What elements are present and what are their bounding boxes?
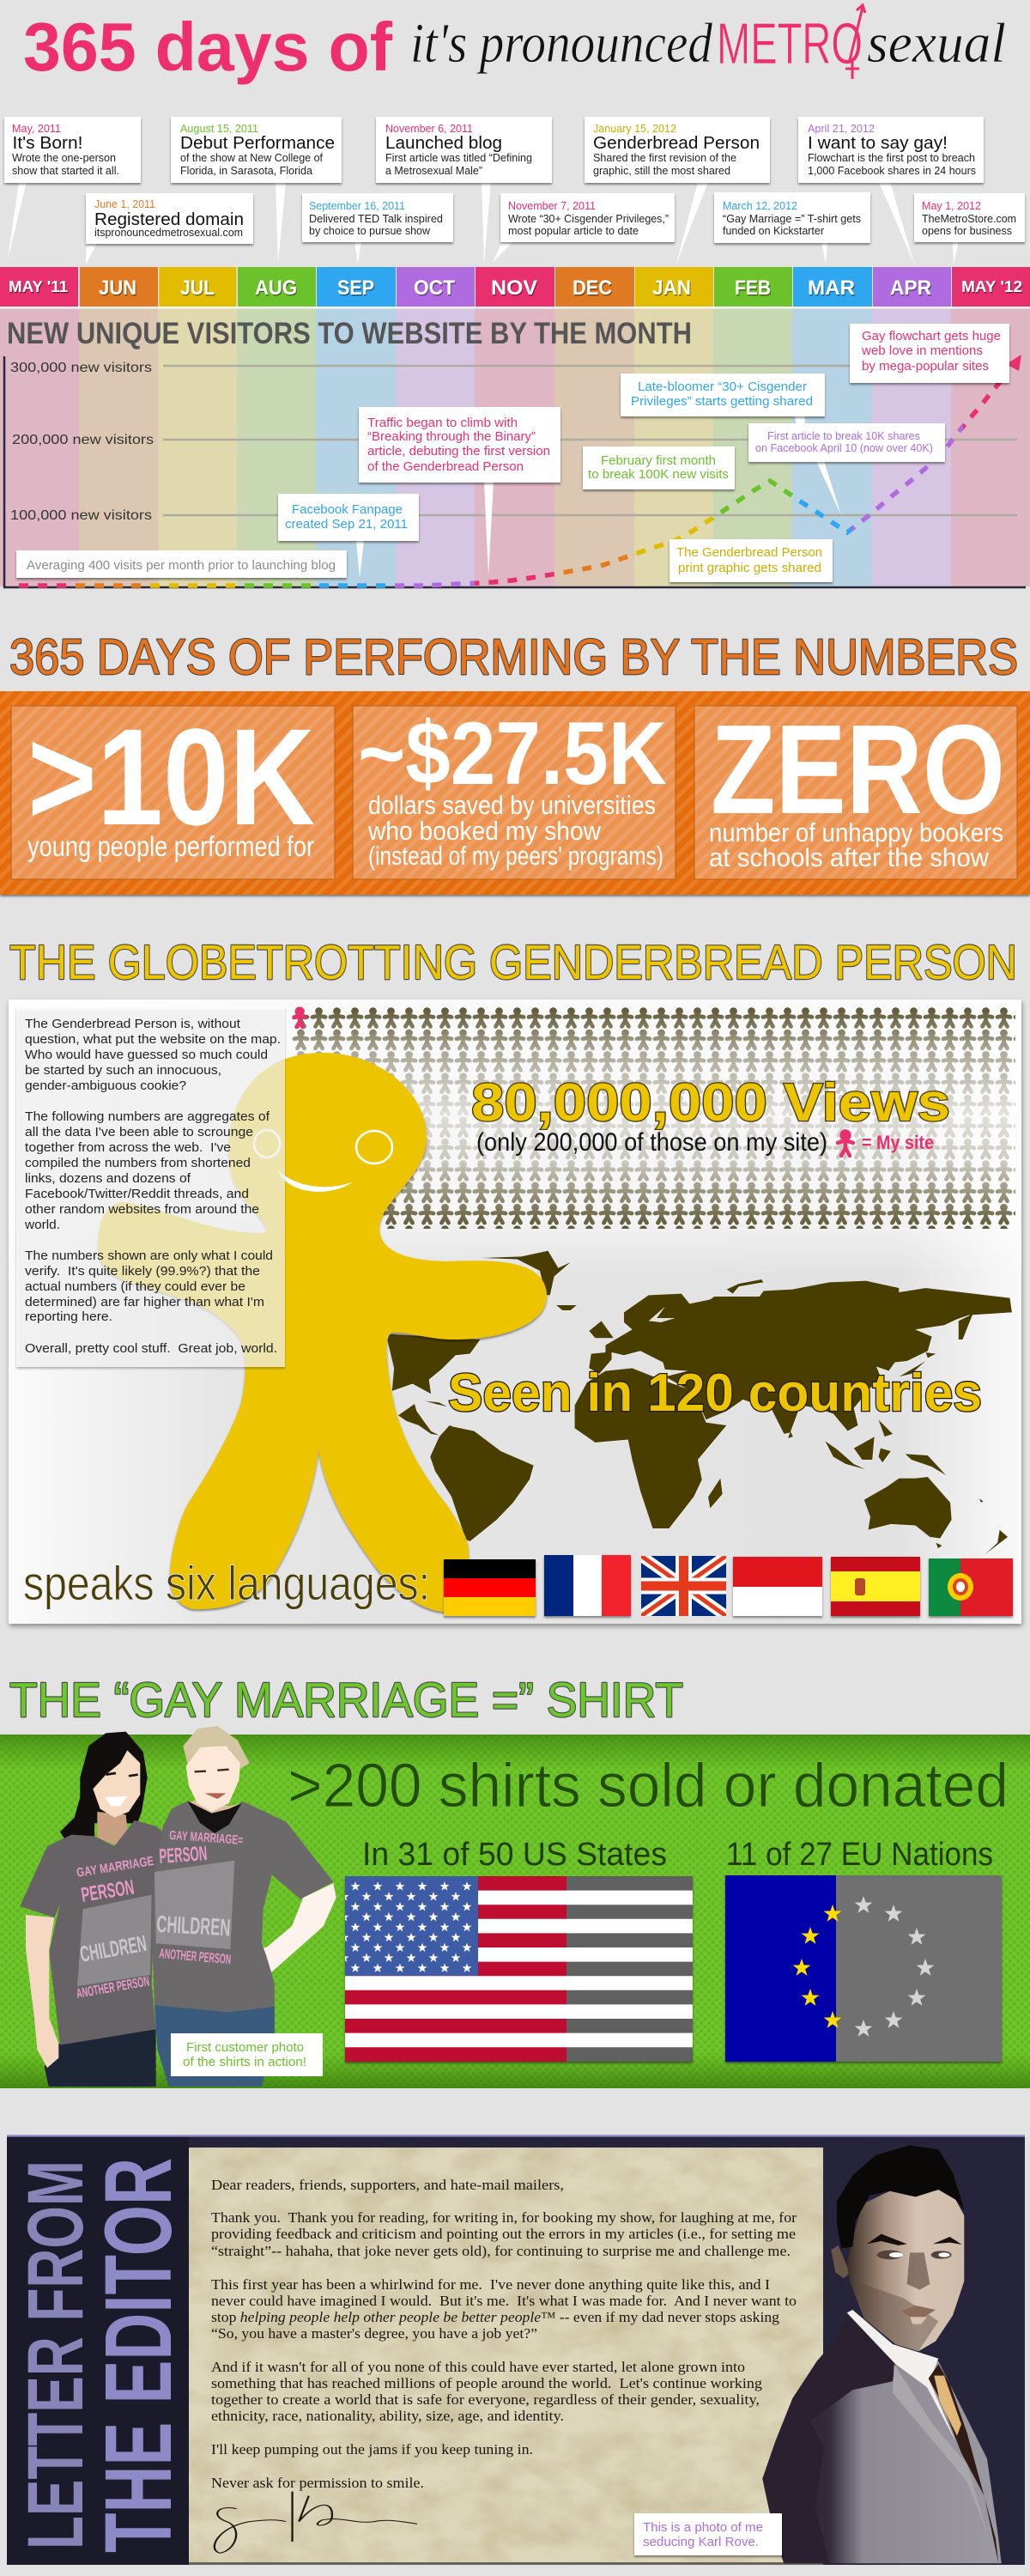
text box: intro: verify. It's quite likely (99.9%?) that the [25,1264,260,1279]
text box: intro: determined) are far higher than what I'm [25,1295,264,1309]
shirt print right: GAY MARRIAGE: GAY MARRIAGE= [169,1828,244,1848]
figure left eye [254,1130,280,1157]
axis labels: 100,000 new visitors [10,508,152,523]
chart callout: gay flowchart: by mega-popular sites [862,359,989,374]
chart axes [4,356,1026,587]
letter text: “straight”-- hahaha, that joke never gets old), for continuing to surprise me and challenge me. [211,2243,791,2259]
stat: shirts sold or donated: >200 shirts sold or donated [288,1752,1009,1820]
timeline month bar: JUL [180,276,215,300]
chart callout: gay flowchart: Gay flowchart gets huge [862,329,1001,343]
text box: intro: compiled the numbers from shortened [25,1156,251,1170]
chart callout: late-bloomer: Privileges” starts getting shared [631,394,813,409]
letter text: Thank you. Thank you for reading, for writing in, for booking my show, for laughing at me, for [211,2209,797,2226]
left shirt grey print [77,1895,152,1986]
callout: May 1 2012 [914,193,1025,264]
world map [386,1251,1012,1554]
text box: intro: all the data I've been able to scrounge [25,1125,253,1139]
right person face [186,1746,240,1812]
flag: partial EU [725,1875,1002,2062]
figure smile [277,1170,354,1192]
text box: intro: Who would have guessed so much could [25,1048,268,1062]
left person face [93,1750,140,1818]
author dark shoulder [762,2312,895,2563]
left person jeans [45,2029,156,2087]
text box: intro: together from across the web. I've [25,1140,231,1155]
timeline month bar: JAN [652,276,691,300]
timeline month bar: DEC [573,276,612,300]
title: 365 days of: 365 days of [23,9,392,85]
callout: June 1 2011: June 1, 2011 [94,198,155,210]
axis labels: 300,000 new visitors [10,361,152,375]
chart callout: February first month: February first month [601,453,716,468]
stat: 80,000,000 views: 80,000,000 Views [471,1073,950,1133]
chart callout: Facebook Fanpage: created Sep 21, 2011 [285,517,408,532]
author left eye [877,2251,903,2259]
text box: intro: question, what put the website on the map. [25,1032,281,1047]
chart callout: late-bloomer: Late-bloomer “30+ Cisgender [638,380,807,394]
photo caption: First customer photo [186,2040,304,2055]
author hair [837,2145,964,2248]
text box: intro: world. [24,1218,60,1232]
callout: March 12 2012: “Gay Marriage =” T-shirt gets [723,212,861,225]
callout: April 21 2012: Flowchart is the first post to breach [808,151,975,164]
photo: author in suit [762,2145,1002,2563]
right person shirt [152,1801,333,2012]
legend: pink person icon [838,1132,853,1156]
stat: 27.5K dollars [353,704,676,879]
chart callout: first article to break 10K: First article to break 10K shares [767,430,920,442]
shirt print left: PERSON: PERSON [80,1876,136,1907]
icon: signature [215,2492,417,2553]
shirt print right: CHILDREN: CHILDREN [156,1911,231,1941]
stat: seen in 120 countries: Seen in 120 countries [448,1364,982,1423]
text box: intro: The Genderbread Person is, without [25,1017,241,1031]
people icon grid [292,1007,1015,1229]
icon: gender symbol arrows [845,5,865,79]
stat: more than 10K: young people performed for [27,830,314,862]
author lower lip [910,2317,927,2324]
chart callout: averaging 400 visits [16,550,347,578]
callout: April 21 2012: April 21, 2012 [808,123,875,135]
chart callout: Genderbread print graphic: print graphic gets shared [678,561,821,575]
flag: Portugal [929,1558,1013,1616]
timeline month bar: APR [890,276,931,300]
right person neck [189,1801,243,1832]
text box: intro: The numbers shown are only what I could [25,1249,273,1263]
callout: June 1 2011 [86,193,253,264]
left person hair [60,1732,148,1850]
text box: intro: gender-ambiguous cookie? [25,1078,186,1093]
figure right eye [356,1131,392,1163]
text box: intro [16,1007,285,1367]
left person shirt [20,1820,166,2045]
callout: November 6 2011: Launched blog [385,134,502,153]
letter paper [189,2148,823,2565]
timeline month bar: MAR [808,276,855,300]
callout: May 2011: May, 2011 [12,123,61,135]
panel: letter from the editor [7,2135,1025,2565]
chart callout: February first month [583,447,735,489]
note: only 200,000 on my site: (only 200,000 of those on my site) [476,1128,827,1157]
stat: 27.5K dollars: ~$27.5K [358,704,667,804]
stat: zero: at schools after the show [709,842,990,872]
letter text [211,2177,797,2491]
photo caption: Karl Rove: seducing Karl Rove. [643,2535,759,2549]
heading: new unique visitors: NEW UNIQUE VISITORS TO WEBSITE BY THE MONTH [7,317,692,350]
chart background month stripes [0,308,1030,586]
letter text: ethnicity, race, nationality, ability, size, age, and identity. [211,2408,564,2424]
arrow head [1006,355,1021,371]
timeline month bar: MAY '11 [9,278,68,295]
letter text: together to create a world that is safe for everyone, regardless of their gender, sexuality, [211,2391,760,2408]
left person arm [26,1915,58,2068]
callout: January 15 2012 [585,117,770,264]
callout: November 7 2011: most popular article to date [508,224,639,237]
label: EU nations: 11 of 27 EU Nations [726,1837,993,1873]
stat: 27.5K dollars: dollars saved by universities [368,790,656,820]
callout: May 2011 [4,117,141,259]
title: METRO: METRO [717,11,863,76]
right shirt grey print [154,1861,234,1949]
author brows [867,2234,962,2245]
callout: November 7 2011: Wrote “30+ Cisgender Privileges,” [508,212,669,225]
icon: pink person [294,1009,306,1027]
letter text: stop helping people help other people be better people ™ -- even if my dad never stops asking [211,2309,780,2325]
letter text: something that has reached millions of people around the world. Let's continue working [211,2375,763,2391]
right person arm [225,1883,336,1981]
axis labels [10,361,154,523]
callout: April 21 2012: I want to say gay! [808,134,948,153]
shirt print left: ANOTHER PERSON: ANOTHER PERSON [76,1974,150,2002]
text box: intro: reporting here. [25,1309,112,1324]
callout: August 15 2011: Florida, in Sarasota, Florida [180,164,313,177]
text box: intro: links, dozens and dozens of [25,1171,191,1186]
chart callout: traffic began to climb: “Breaking through the Binary” [367,429,536,444]
flags: six languages [444,1555,1013,1616]
panel: performing numbers [0,691,1030,895]
author nose shadow [907,2252,930,2290]
text box: intro: The following numbers are aggregates of [25,1109,270,1124]
callout: August 15 2011: Debut Performance [180,134,335,153]
flag: Germany [444,1559,536,1616]
callout: January 15 2012: January 15, 2012 [593,123,676,135]
callout: May 2011: Wrote the one-person [12,151,116,164]
line chart: visitors [4,355,1026,587]
callout: August 15 2011: of the show at New College of [180,151,323,164]
letter text: never could have imagined I would. But it's me. It's what I was made for. And I never want to [211,2293,797,2309]
chart callout: gay flowchart [850,324,1009,383]
callout: November 7 2011: November 7, 2011 [508,200,596,212]
left person smile [105,1796,127,1806]
stat: 27.5K dollars: (instead of my peers' programs) [368,841,663,871]
callout: March 12 2012: funded on Kickstarter [723,224,825,237]
photo caption: Karl Rove: This is a photo of me [643,2520,763,2535]
callout: May 2011: It's Born! [12,134,82,153]
title [23,5,1006,85]
flat start of visitors dashed line [19,583,423,588]
legend: my site: = My site [862,1132,934,1153]
chart callout: Facebook Fanpage: Facebook Fanpage [292,502,403,517]
timeline month bar: MAY '12 [961,278,1022,295]
photo: two people wearing shirts [20,1726,336,2087]
callout: June 1 2011: Registered domain [94,210,244,229]
chart callout: traffic began to climb [359,407,560,575]
timeline month bar: OCT [414,276,455,300]
callout: August 15 2011 [171,117,342,263]
letter text: Never ask for permission to smile. [211,2475,424,2491]
callout: November 6 2011 [376,117,552,264]
callout: March 12 2012: March 12, 2012 [723,200,797,212]
photo caption: of the shirts in action! [183,2055,306,2069]
chart callout: traffic began to climb: Traffic began to climb with [367,416,518,430]
timeline month bar: AUG [255,276,297,300]
author stubble [856,2281,938,2351]
shirt print right: PERSON: PERSON [159,1842,208,1868]
chart callout: gay flowchart: web love in mentions [861,343,983,358]
letter text: And if it wasn't for all of you none of this could have ever started, let alone grown into [211,2359,745,2375]
right person hair [183,1726,250,1769]
callout: November 6 2011: November 6, 2011 [385,123,473,135]
left person eyes [106,1773,138,1776]
heading: gay marriage shirt: THE “GAY MARRIAGE =” SHIRT [9,1673,683,1728]
chart callout: traffic began to climb: of the Genderbread Person [367,459,524,474]
callout: September 16 2011: Delivered TED Talk inspired [309,212,443,225]
callout: January 15 2012: graphic, still the most shared [593,164,730,177]
author shirt [847,2310,955,2441]
letter text: This first year has been a whirlwind for me. I've never done anything quite like this, and I [211,2276,770,2293]
text box: intro: actual numbers (if they could ever be [25,1279,245,1294]
author suit [762,2312,1002,2563]
author tie [929,2364,998,2563]
flag: Spain [831,1557,920,1616]
text box: intro: Overall, pretty cool stuff. Great job, world. [25,1341,277,1356]
heading: letter from: LETTER FROM [12,2160,100,2549]
photo caption: Karl Rove [634,2513,782,2555]
chart callout: averaging 400 visits: Averaging 400 visits per month prior to launching blog [27,558,336,573]
callout: June 1 2011: itspronouncedmetrosexual.com [94,226,243,239]
callout: September 16 2011: September 16, 2011 [309,200,405,212]
flag: Indonesia [733,1557,822,1616]
text box: intro: be started by such an innocuous, [25,1063,221,1078]
callout: January 15 2012: Shared the first revision of the [593,151,736,164]
figure: genderbread person [98,1053,547,1612]
callout: November 7 2011 [493,193,675,263]
panel: shirt [0,1726,1030,2088]
letter text: I'll keep pumping out the jams if you keep tuning in. [211,2441,533,2458]
chart callout: Facebook Fanpage [278,494,419,578]
chart callout: late-bloomer [621,374,825,438]
callout: May 1 2012: May 1, 2012 [922,200,981,212]
title: sexual: sexual [867,12,1006,75]
title: it's pronounced: it's pronounced [410,12,713,75]
heading: the editor: THE EDITOR [86,2158,191,2553]
author right eye white [938,2252,950,2257]
flag: partial US [345,1876,693,2062]
chart callout: traffic began to climb: article, debuting the first version [367,444,550,459]
stat: 27.5K dollars: who booked my show [367,816,602,846]
shirt print left: GAY MARRIAGE: GAY MARRIAGE [76,1854,155,1880]
left person neck [97,1812,129,1844]
panel: globetrotting [9,999,1021,1624]
author ear [831,2245,850,2278]
author lapel [893,2364,987,2533]
chart callout: first article to break 10K: on Facebook April 10 (now over 40K) [755,442,933,454]
letter text: Dear readers, friends, supporters, and hate-mail mailers, [211,2177,564,2193]
callout: September 16 2011: by choice to pursue show [309,224,431,237]
author mouth [901,2306,936,2317]
timeline month bar [0,267,1030,309]
letter text: “So, you have a master's degree, you have a job yet?” [211,2325,537,2342]
flag: France [544,1555,631,1616]
right person eyes [195,1770,229,1771]
photo caption [171,2033,323,2076]
author tie highlight [934,2376,961,2436]
flag: United Kingdom [641,1556,726,1616]
label: US states: In 31 of 50 US States [362,1837,667,1873]
axis labels: 200,000 new visitors [12,433,154,447]
timeline month bar: NOV [491,276,537,300]
callout: August 15 2011: August 15, 2011 [180,123,258,135]
right person jeans [154,2005,275,2087]
map sea cuts [649,1307,676,1322]
callout: May 2011: show that started it all. [12,164,119,177]
chart callout: Genderbread print graphic: The Genderbread Person [676,545,822,560]
shirt print right: ANOTHER PERSON: ANOTHER PERSON [159,1947,232,1967]
text: speaks six languages: speaks six languages: [23,1556,430,1610]
text box: intro: Facebook/Twitter/Reddit threads, and [25,1187,249,1201]
chart callout: first article to break 10K [748,423,945,515]
text box: intro: other random websites from around the [25,1202,259,1217]
author face [847,2190,964,2351]
author right eye [931,2251,952,2259]
callout: March 12 2012 [714,192,870,264]
chart callout: Genderbread print graphic [670,539,833,582]
callout: April 21 2012: 1,000 Facebook shares in 24 hours [808,164,976,177]
letter text: providing feedback and criticism and pointing out the errors in my articles (i.e., for setting me [211,2226,796,2242]
visitors dashed line [433,377,1004,586]
right shirt collar [187,1801,242,1833]
timeline month bar: SEP [337,276,374,300]
timeline month bar: JUN [99,276,136,300]
shirt print left: CHILDREN: CHILDREN [78,1930,148,1967]
timeline month bar: FEB [735,276,771,300]
stat: more than 10K: >10K [27,700,315,854]
callout: January 15 2012: Genderbread Person [593,134,760,153]
callout: May 1 2012: TheMetroStore.com [922,212,1016,225]
callout: November 6 2011: a Metrosexual Male” [385,164,482,177]
callout: November 6 2011: First article was titled “Defining [385,151,532,164]
author left eye white [889,2252,903,2257]
chart gridlines [163,366,1017,515]
right person smile [204,1793,226,1799]
callout: April 21 2012 [798,117,984,264]
chart callout: February first month: to break 100K new visits [588,467,729,482]
callout: May 1 2012: opens for business [922,224,1012,237]
callout: September 16 2011 [302,193,453,264]
